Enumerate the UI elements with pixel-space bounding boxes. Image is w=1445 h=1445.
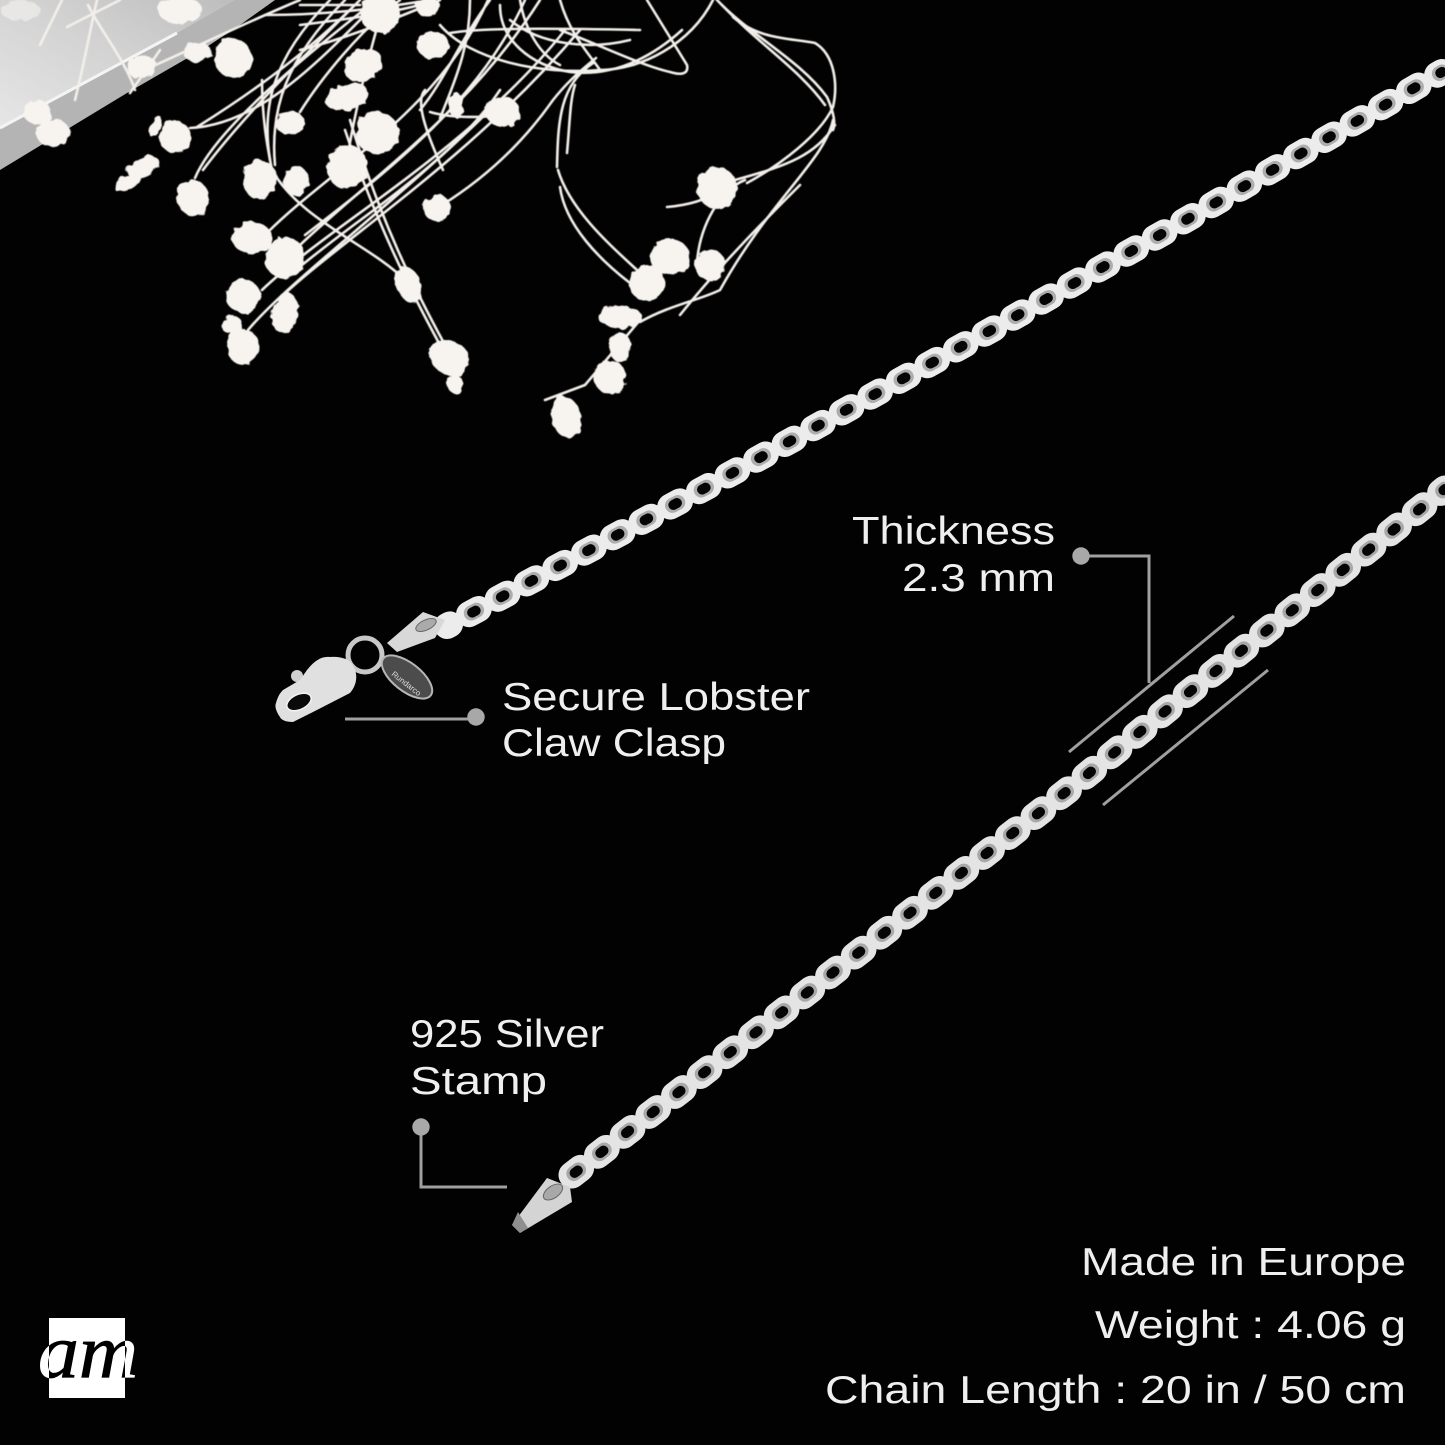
thickness leader and guide lines [1069, 547, 1268, 805]
thickness label: 2.3 mm [902, 557, 1055, 600]
lobster claw clasp [275, 612, 445, 722]
dried white flowers [0, 0, 835, 441]
product specifications: Made in Europe [1081, 1241, 1406, 1284]
callout: lobster clasp [345, 676, 821, 765]
lower chain [572, 489, 1445, 1175]
flower stems [40, 0, 835, 400]
stamp label: 925 Silver [410, 1013, 604, 1056]
brand logo: am [38, 1310, 138, 1394]
chain end cap with 925 stamp [387, 612, 445, 652]
lower chain end cap with 925 stamp [512, 1178, 572, 1233]
thickness label: Thickness [852, 510, 1055, 553]
white block at top left [0, 0, 275, 170]
clasp body [275, 657, 356, 722]
stamp leader line [412, 1118, 507, 1187]
flower heads [0, 0, 737, 441]
jump ring [348, 638, 382, 672]
brand tag [375, 647, 439, 707]
clasp label: Claw Clasp [502, 722, 726, 765]
callout: 925 silver stamp [410, 1013, 615, 1187]
brand tag: Rundarco [390, 669, 423, 698]
upper chain [447, 72, 1442, 626]
stamp label: Stamp [410, 1060, 547, 1103]
clasp leader line [345, 708, 485, 726]
product specifications [825, 1241, 1406, 1412]
product specifications: Chain Length : 20 in / 50 cm [825, 1369, 1406, 1412]
callout: thickness [852, 510, 1268, 805]
clasp label: Secure Lobster [502, 676, 810, 719]
product specifications: Weight : 4.06 g [1095, 1304, 1406, 1347]
